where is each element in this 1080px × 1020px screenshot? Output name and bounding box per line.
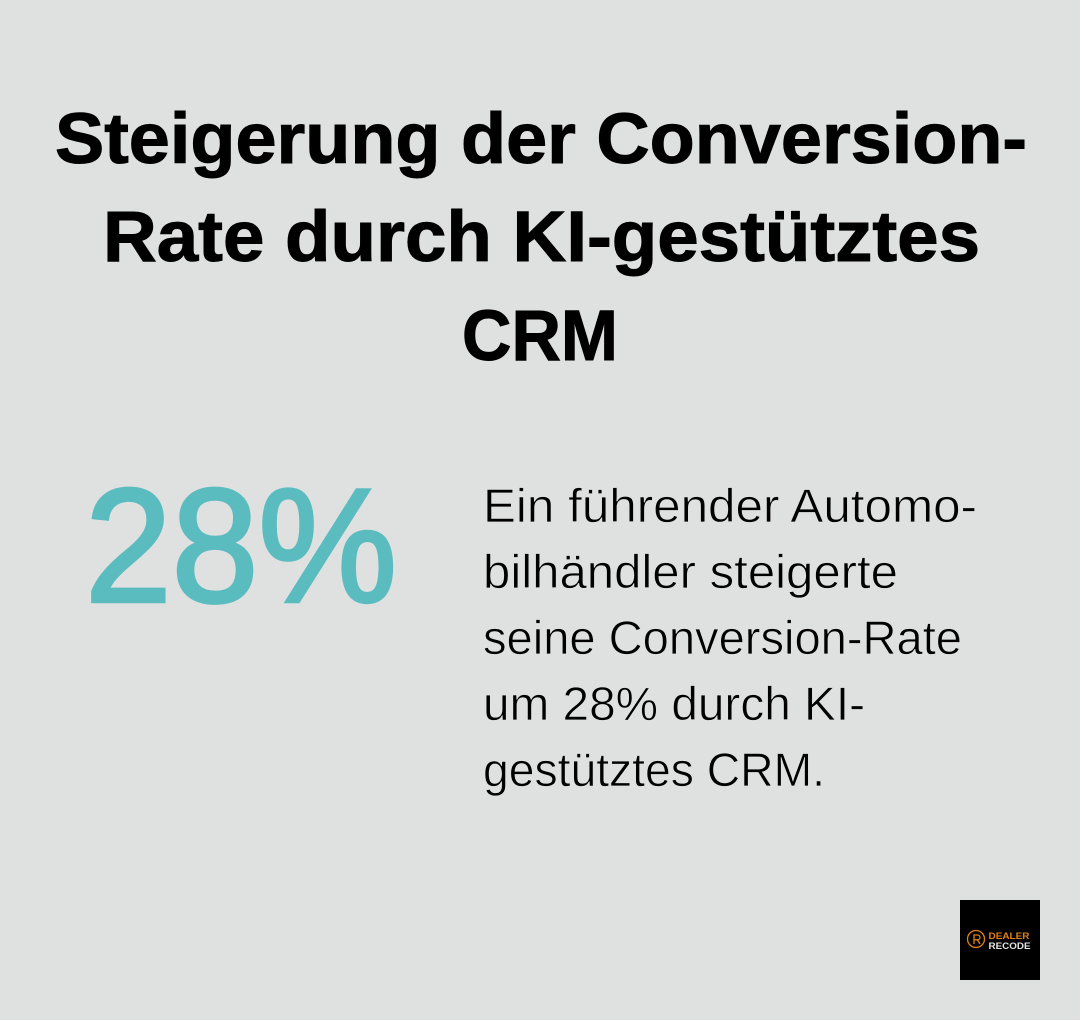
title: Steigerung der Conversion- <box>55 100 1027 179</box>
logo: Dealer Recode <box>960 900 1040 980</box>
description text: Ein führender Automo- <box>483 479 977 532</box>
statistic: 28%: 28% <box>85 456 397 636</box>
logo wordmark <box>988 931 1030 952</box>
title <box>55 100 1027 376</box>
description text: bilhändler steigerte <box>483 545 898 598</box>
description text: seine Conversion-Rate <box>483 611 962 664</box>
logo wordmark: DEALER <box>988 931 1030 942</box>
icon: logo ring with R <box>968 930 984 948</box>
title: Rate durch KI-gestütztes <box>103 198 980 277</box>
description text: gestütztes CRM. <box>483 743 825 796</box>
title: CRM <box>462 297 618 376</box>
description text: um 28% durch KI- <box>483 677 865 730</box>
description text <box>483 479 977 796</box>
logo wordmark: RECODE <box>988 941 1030 952</box>
